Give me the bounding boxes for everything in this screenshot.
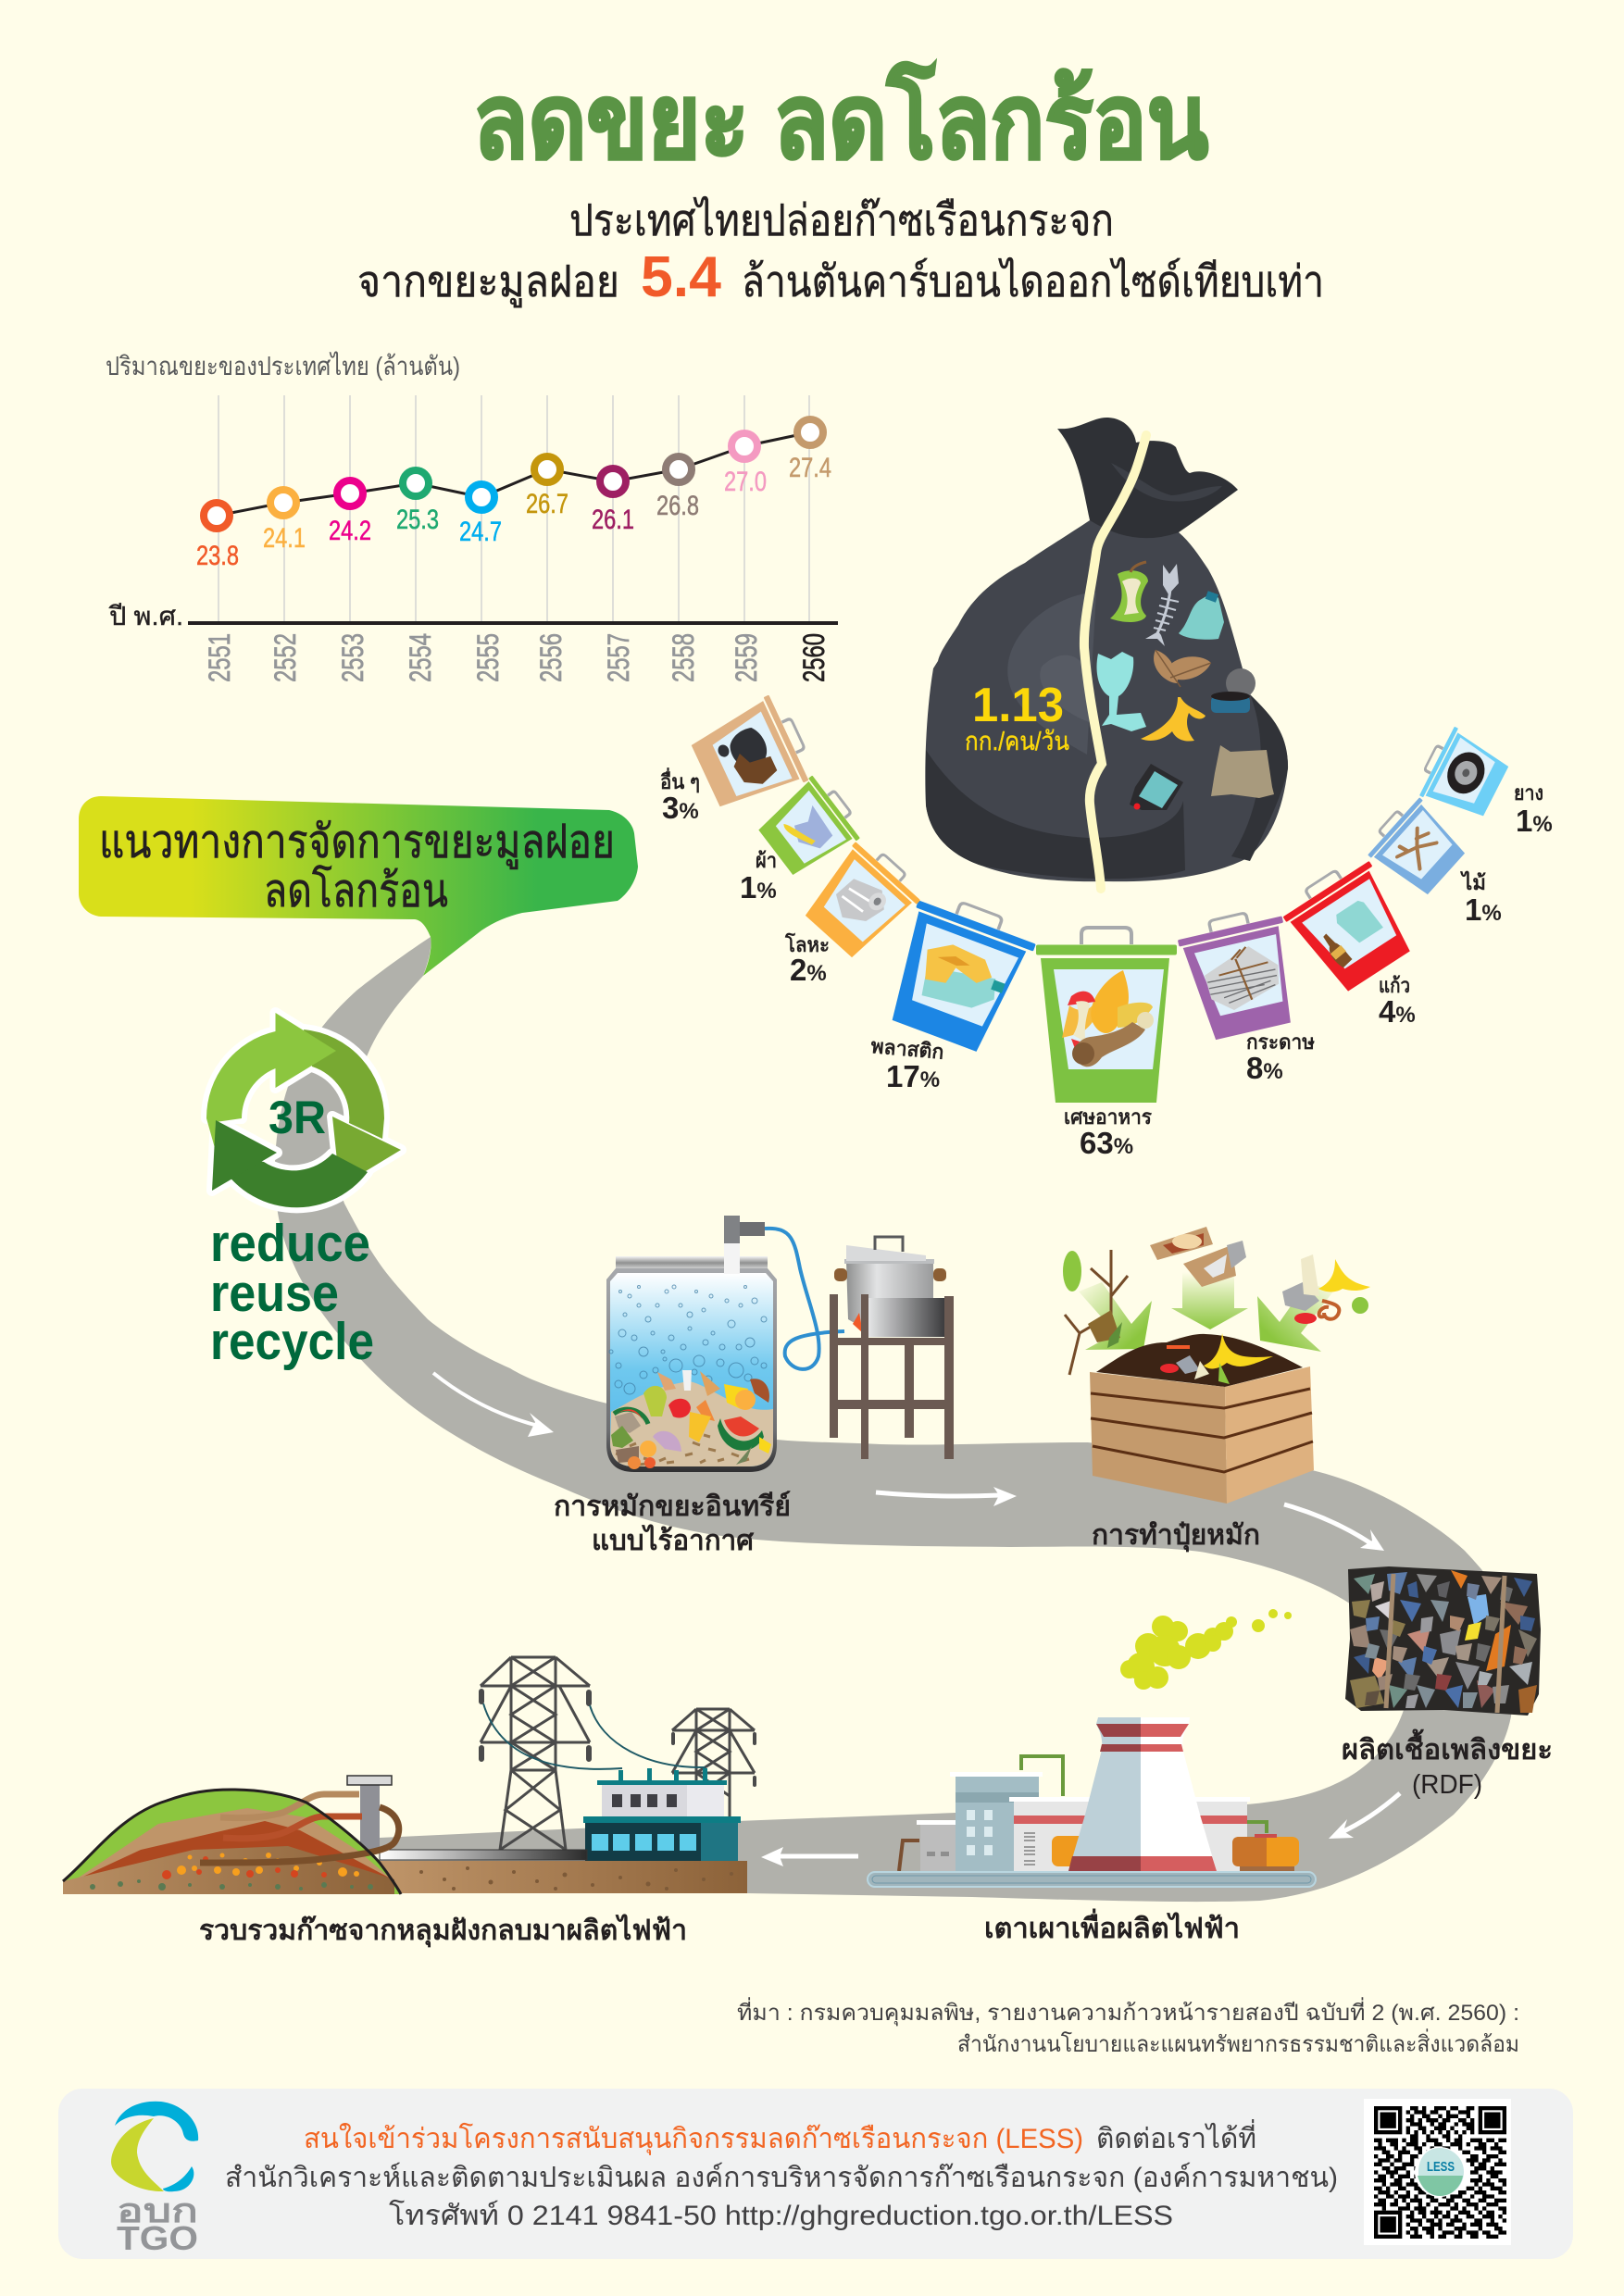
- subtitle: จากขยะมูลฝอย: [357, 256, 619, 308]
- bin labels and percentages: ไม้: [1460, 870, 1486, 894]
- caption: RDF: ผลิตเชื้อเพลิงขยะ: [1342, 1728, 1553, 1766]
- bin: cloth 1%: [752, 770, 867, 884]
- illustration: landfill with gas pipes: [63, 1776, 587, 1894]
- soil mound: [1096, 1334, 1303, 1387]
- contact text: โทรศัพท์ 0 2141 9841-50 http://ghgreduction.tgo.or.th/LESS: [389, 2199, 1173, 2231]
- line chart: waste per year: 27.0: [724, 467, 767, 497]
- bin labels and percentages: 8%: [1246, 1051, 1283, 1085]
- bin labels and percentages: ยาง: [1514, 781, 1543, 805]
- pipe: T vent and horizontal: [360, 1783, 380, 1853]
- illustration: transmission towers: [481, 1657, 755, 1850]
- bin labels and percentages: 3%: [662, 791, 699, 825]
- chart title: ปริมาณขยะของประเทศไทย (ล้านตัน): [106, 352, 460, 381]
- line chart: waste per year: 24.1: [263, 523, 306, 554]
- wooden box: [1090, 1372, 1227, 1504]
- arrows on the road: [433, 1373, 1400, 1866]
- bin: plastic 17%: [876, 888, 1041, 1058]
- bag stat: กก./คน/วัน: [965, 727, 1069, 755]
- caption: anaerobic digestion: แบบไร้อากาศ: [592, 1524, 755, 1556]
- small grey building: [899, 1820, 956, 1871]
- line chart: waste per year: ปี พ.ศ.: [108, 602, 183, 630]
- QR code: [1364, 2099, 1511, 2245]
- garbage bag: [925, 418, 1288, 889]
- bag items: waste icons: [1096, 562, 1274, 810]
- line chart: waste per year: 23.8: [196, 541, 239, 571]
- callout: waste management guideline: แนวทางการจัดการขยะมูลฝอย: [99, 816, 615, 869]
- source note: สำนักงานนโยบายและแผนทรัพยากรธรรมชาติและสิ่งแวดล้อม: [957, 2028, 1519, 2057]
- bin labels and percentages: 17%: [886, 1059, 940, 1093]
- caption: anaerobic digestion: [554, 1491, 791, 1556]
- caption: RDF: [1342, 1728, 1553, 1800]
- compost inputs: [1063, 1227, 1370, 1375]
- cooling tower: [1068, 1717, 1217, 1871]
- jar waste contents: [610, 1370, 773, 1469]
- landfill mound: [63, 1790, 401, 1894]
- bin labels and percentages: แก้ว: [1379, 974, 1410, 997]
- illustration: anaerobic digester jar: [606, 1216, 844, 1472]
- smoke from chimney: [1120, 1609, 1292, 1690]
- line chart: waste per year: 2557: [602, 633, 635, 682]
- illustration: compost box: [1063, 1227, 1370, 1504]
- caption: anaerobic digestion: การหมักขยะอินทรีย์: [554, 1491, 791, 1522]
- subtitle: [357, 195, 1324, 309]
- caption: composting: การทำปุ๋ยหมัก: [1092, 1520, 1260, 1553]
- soil speckles: [419, 1866, 733, 1890]
- bin: paper 8%: [1175, 905, 1305, 1043]
- bin labels and percentages: 63%: [1080, 1126, 1133, 1160]
- line chart: waste per year: 26.8: [656, 491, 699, 521]
- caption: RDF: (RDF): [1412, 1770, 1482, 1800]
- gas collection tubes: [220, 1794, 359, 1818]
- bin labels and percentages: 1%: [1516, 804, 1553, 838]
- reduce reuse recycle text: recycle: [210, 1312, 374, 1371]
- fuel tank: [1232, 1822, 1299, 1872]
- biogas pipe and hose: [724, 1216, 740, 1243]
- reduce reuse recycle text: reduce: [210, 1214, 370, 1273]
- contact text: สำนักวิเคราะห์และติดตามประเมินผล องค์การบริหารจัดการก๊าซเรือนกระจก (องค์การมหาชน): [225, 2162, 1338, 2193]
- bag seam: [1084, 435, 1146, 889]
- line chart: waste per year: 27.4: [789, 453, 831, 483]
- logo: TGO: TGO: [117, 2219, 198, 2257]
- line chart: waste per year: 2560: [797, 633, 831, 682]
- red-white building: [1009, 1797, 1250, 1871]
- footer panel: [58, 2089, 1573, 2259]
- bin labels and percentages: 2%: [790, 953, 827, 987]
- bin labels and percentages: พลาสติก: [870, 1034, 944, 1064]
- logo: TGO: [111, 2102, 198, 2257]
- bin: metal 2%: [796, 834, 927, 966]
- bin: wood 1%: [1362, 792, 1472, 903]
- bin: rubber 1%: [1413, 723, 1514, 826]
- landfill outline: [63, 1790, 401, 1894]
- contact text: ติดต่อเราได้ที่: [1096, 2119, 1256, 2154]
- road: curved grey process path: [275, 937, 1518, 1902]
- contact text: [225, 2119, 1338, 2231]
- QR code: LESS: [1427, 2159, 1455, 2175]
- line chart: waste per year: 26.1: [592, 505, 634, 535]
- caption: incinerator: เตาเผาเพื่อผลิตไฟฟ้า: [984, 1908, 1240, 1944]
- ground soil: [370, 1861, 747, 1893]
- illustration: power plant incinerator: [868, 1717, 1316, 1887]
- line chart: waste per year: 2551: [203, 633, 236, 682]
- blue building: [950, 1756, 1063, 1871]
- icon: 3R recycle arrows: [206, 1013, 401, 1207]
- bin labels and percentages: ผ้า: [756, 849, 777, 872]
- line chart: waste per year: 2554: [404, 633, 437, 682]
- platform: [868, 1872, 1316, 1887]
- bin labels and percentages: โลหะ: [784, 932, 830, 956]
- callout: waste management guideline: [79, 796, 638, 976]
- bin: others 3%: [686, 691, 818, 819]
- line chart: waste per year: 2558: [667, 633, 700, 682]
- line chart: waste per year: 2556: [534, 633, 568, 682]
- line chart: waste per year: 2552: [269, 633, 302, 682]
- caption: landfill gas: รวบรวมก๊าซจากหลุมฝังกลบมาผลิตไฟฟ้า: [199, 1914, 687, 1948]
- line chart: waste per year: 2559: [730, 633, 763, 682]
- bin labels and percentages: 1%: [740, 870, 777, 905]
- bin: glass 4%: [1277, 852, 1422, 999]
- callout: waste management guideline: ลดโลกร้อน: [264, 865, 448, 917]
- bin labels and percentages: 4%: [1379, 994, 1416, 1029]
- contact text: สนใจเข้าร่วมโครงการสนับสนุนกิจกรรมลดก๊าซเรือนกระจก (LESS): [304, 2122, 1083, 2156]
- bin labels and percentages: [660, 767, 1553, 1160]
- line chart: waste per year: 25.3: [396, 505, 439, 535]
- subtitle: ประเทศไทยปล่อยก๊าซเรือนกระจก: [569, 195, 1114, 244]
- title: ลดขยะ ลดโลกร้อน: [473, 62, 1208, 180]
- reduce reuse recycle text: reuse: [210, 1264, 339, 1323]
- bin labels and percentages: อื่น ๆ: [660, 767, 700, 793]
- logo: TGO: อบก: [117, 2191, 198, 2229]
- source note: ที่มา : กรมควบคุมมลพิษ, รายงานความก้าวหน้ารายสองปี ฉบับที่ 2 (พ.ศ. 2560) :: [737, 1997, 1519, 2027]
- bin labels and percentages: 1%: [1465, 892, 1502, 927]
- subtitle: ล้านตันคาร์บอนไดออกไซด์เทียบเท่า: [742, 256, 1324, 306]
- line chart: waste per year: 24.2: [329, 516, 371, 546]
- line chart: waste per year: 2555: [471, 633, 505, 682]
- bin: food waste 63%: [1036, 928, 1177, 1103]
- line chart: waste per year: [108, 395, 838, 682]
- bag stat: 1.13: [972, 679, 1064, 732]
- subtitle: 5.4: [641, 245, 722, 309]
- bin labels and percentages: เศษอาหาร: [1064, 1105, 1152, 1129]
- reduce reuse recycle text: [210, 1214, 374, 1371]
- power lines: [483, 1703, 706, 1769]
- illustration: substation building: [583, 1768, 741, 1863]
- line chart: waste per year: 26.7: [526, 489, 568, 519]
- bin labels and percentages: กระดาษ: [1246, 1030, 1315, 1054]
- 3R label: 3R: [269, 1092, 326, 1143]
- line chart: waste per year: 2553: [336, 633, 369, 682]
- illustration: stove with pot: [830, 1237, 954, 1459]
- source note: [737, 1997, 1519, 2057]
- illustration: RDF bale: [1345, 1566, 1541, 1716]
- line chart: waste per year: 24.7: [459, 517, 502, 547]
- bag stat: [965, 679, 1069, 755]
